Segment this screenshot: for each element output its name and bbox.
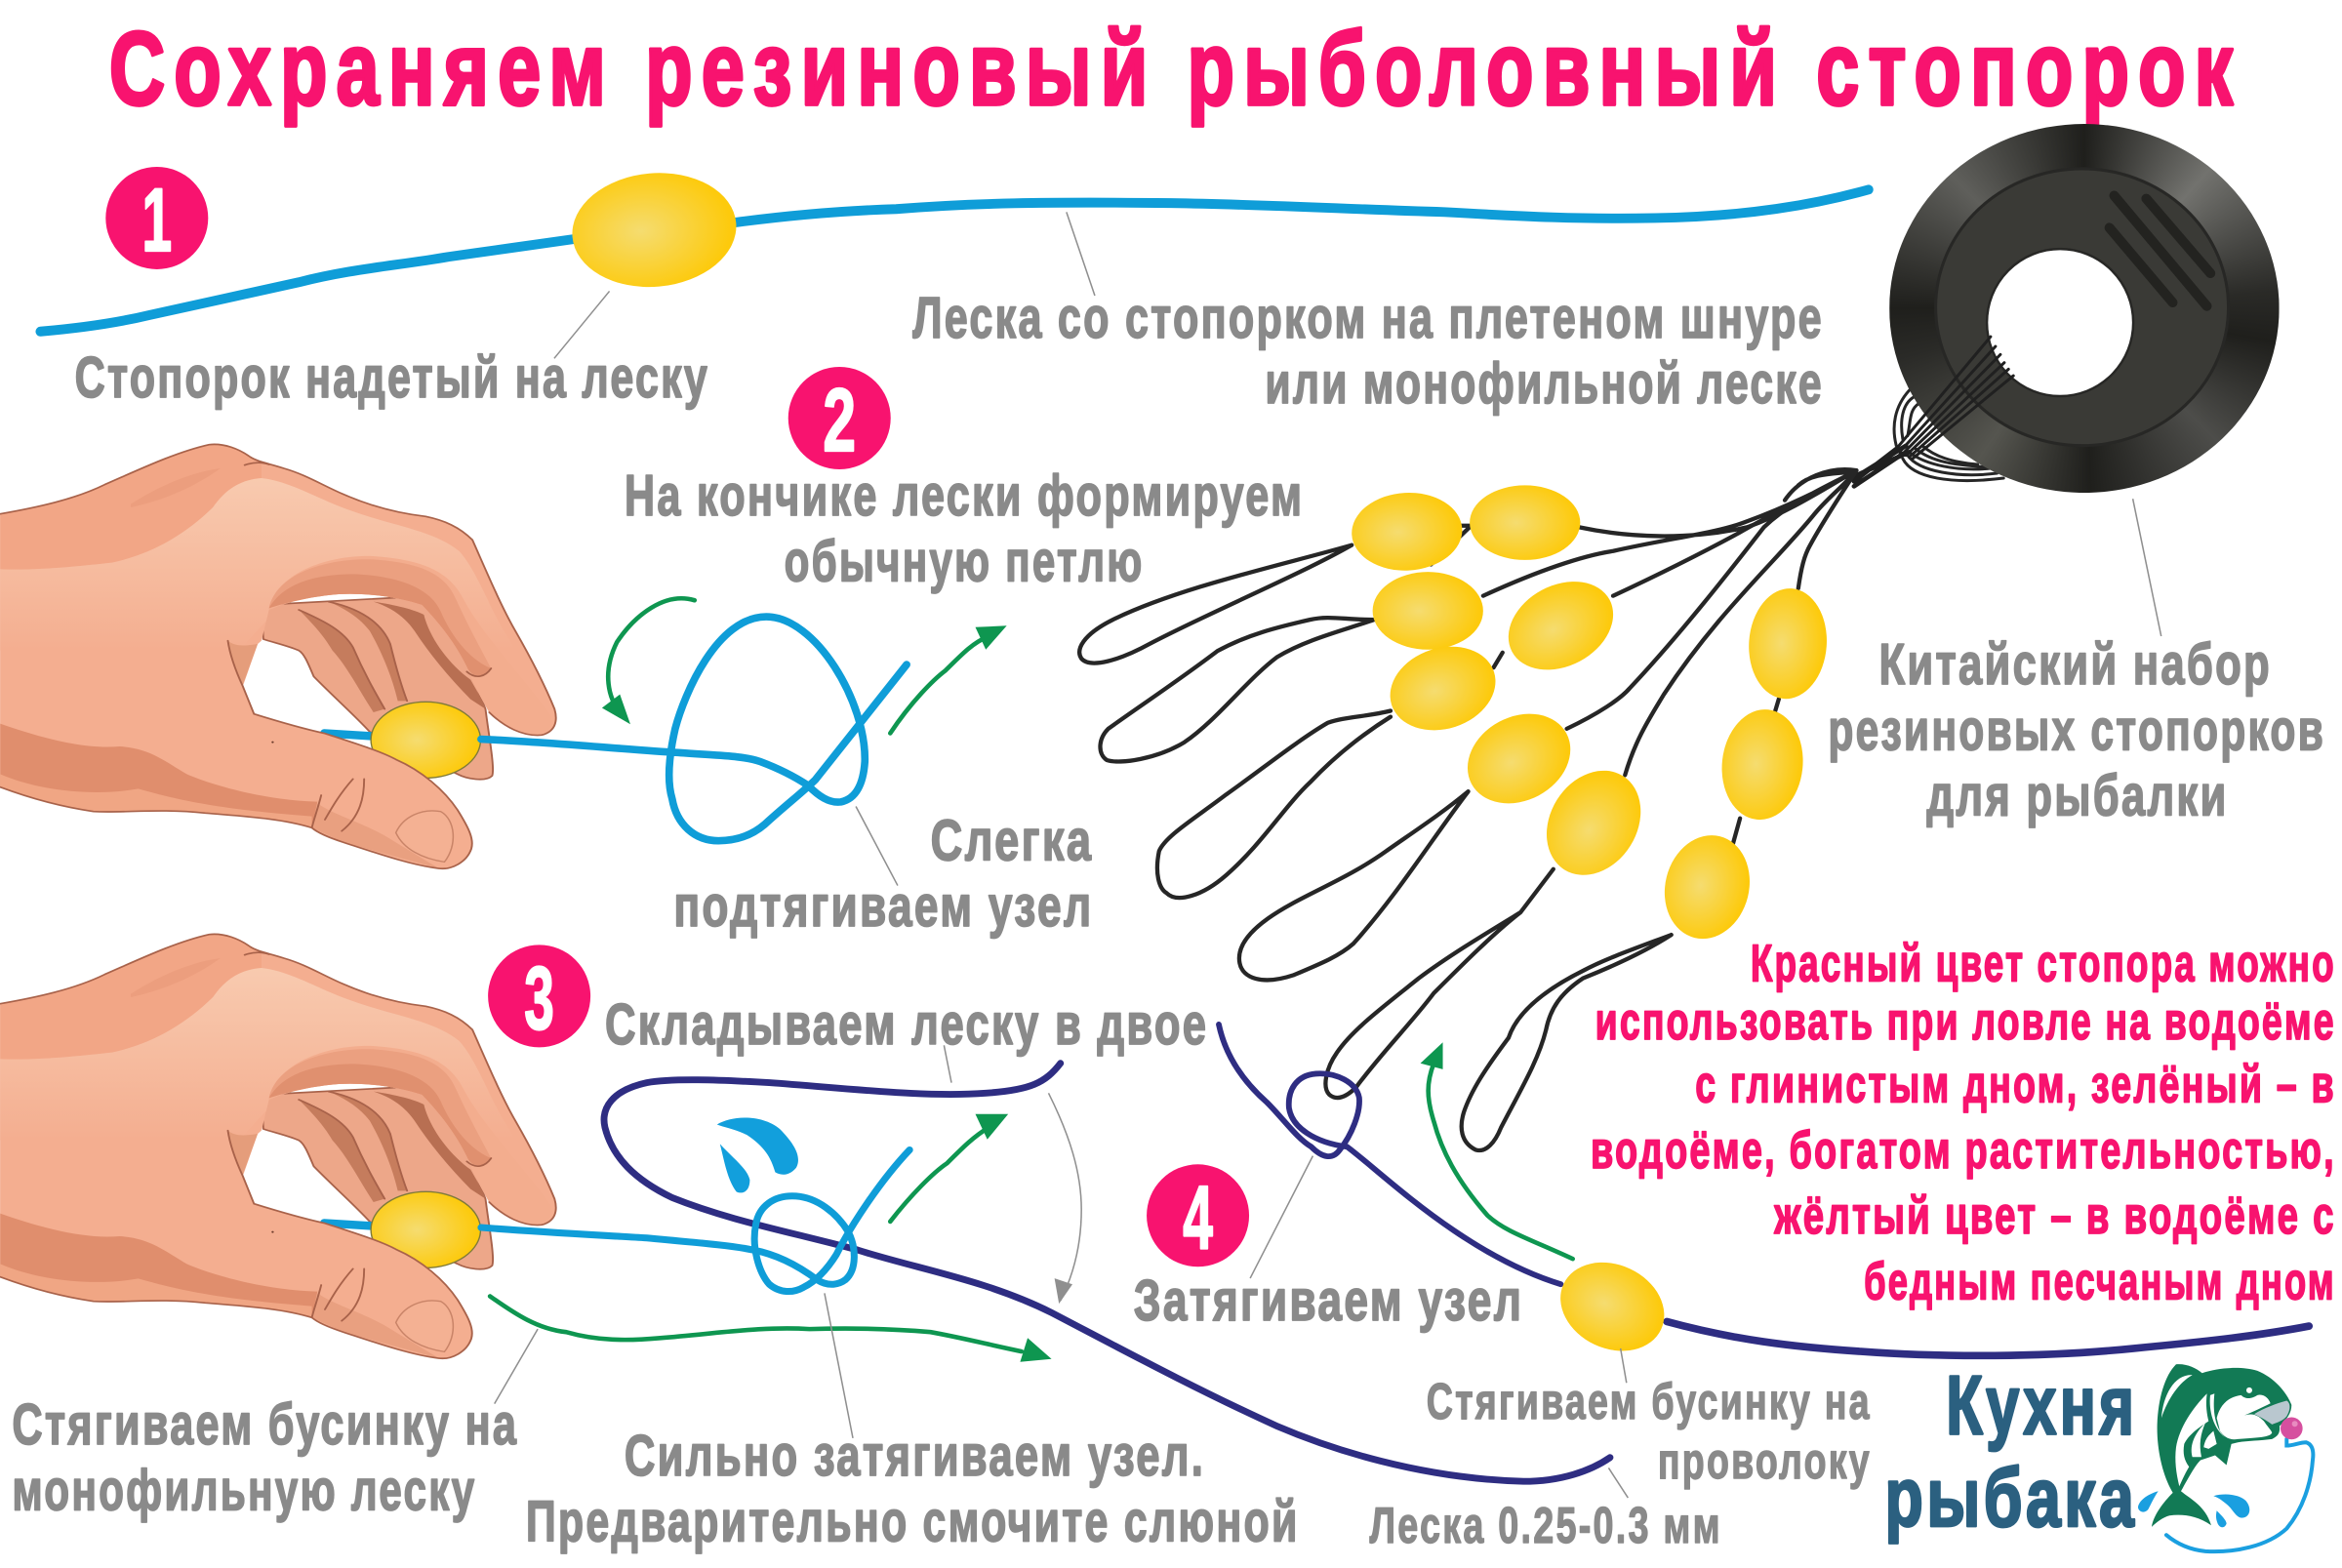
caption: pull bead: Стягиваем бусинку на [12,1391,518,1457]
caption: form loop [625,462,1304,593]
caption: line with stopper: или монофильной леске [1265,350,1824,416]
green arrows step 2 [602,598,1007,733]
logo: Кухня [1946,1358,2137,1452]
caption: chinese set [1828,631,2325,828]
panel: step 2 [0,367,1304,939]
loop C [1157,711,1391,898]
caption: chinese set: для рыбалки [1926,763,2229,828]
loop A [1079,545,1352,663]
caption: tighten knot: Сильно затягиваем узел. [625,1423,1205,1488]
badge 4: 4 [1183,1168,1213,1267]
caption: slightly tighten: подтягиваем узел [673,873,1093,939]
yellow beads [1350,485,1831,947]
caption: line size: Леска 0.25-0.3 мм [1370,1498,1722,1554]
caption: pull bead: монофильную леску [12,1457,476,1522]
navy knot line [1219,1025,1560,1284]
bead on line [1546,1246,1678,1367]
panel: step 3 [0,919,1610,1553]
caption: tighten knot [526,1423,1300,1553]
loop E [1325,869,1554,1098]
badge 4 [1147,1164,1249,1267]
caption: fold line: Складываем леску в двое [605,991,1208,1057]
caption: pull bead onto wire: Стягиваем бусинку на [1427,1374,1872,1430]
caption: stopper on line: Стопорок надетый на леску [75,344,709,410]
caption: form loop: обычную петлю [785,528,1144,593]
hand holding bead [0,429,556,868]
caption: pull bead onto wire [1427,1374,1872,1490]
badge 1 [105,167,208,270]
badge 1: 1 [142,171,172,270]
loop D [1239,791,1469,980]
green arrow step 4 [1421,1042,1573,1259]
stopper bead [568,166,741,294]
green arrows step 3 [490,1114,1052,1362]
caption: tighten knot: Предварительно смочите слюной [526,1488,1300,1553]
badge 2: 2 [823,371,856,470]
loop F [1462,935,1672,1150]
icon: fish [2138,1364,2313,1551]
panel: step 1 line with stopper [40,166,1869,416]
caption: slightly tighten: Слегка [931,808,1093,873]
logo: рыбака [1885,1451,2137,1545]
blue tight knot [481,1149,909,1292]
hand holding bead 2 [0,919,556,1358]
strand loops under disc [1894,390,2003,481]
wrapped strands [1854,337,2013,486]
gray bent arrow [1049,1093,1081,1304]
caption: line with stopper [912,285,1824,416]
caption: pull bead [12,1391,518,1522]
badge 3: 3 [524,948,554,1048]
caption: pull bead onto wire: проволоку [1658,1433,1872,1490]
caption: line with stopper: Леска со стопорком на плетеном шнуре [912,285,1824,350]
blue loop knot [481,617,907,841]
callout: colour advice [1591,936,2336,1311]
icon: water drops [717,1118,798,1192]
caption: form loop: На кончике лески формируем [625,462,1304,528]
panel: step 4 [1134,1025,2309,1554]
badge 2 [788,367,891,470]
caption: tighten knot: Затягиваем узел [1134,1267,1523,1333]
caption: slightly tighten [673,808,1093,939]
blue line [40,189,1869,332]
navy fold line [604,1064,1610,1481]
strands up [1431,469,1856,845]
stoppers set with loops [1079,337,2013,1150]
badge 3 [488,945,590,1048]
logo [1885,1358,2313,1551]
loop B [1100,618,1374,761]
icon: rubber stopper disc [1889,124,2280,493]
